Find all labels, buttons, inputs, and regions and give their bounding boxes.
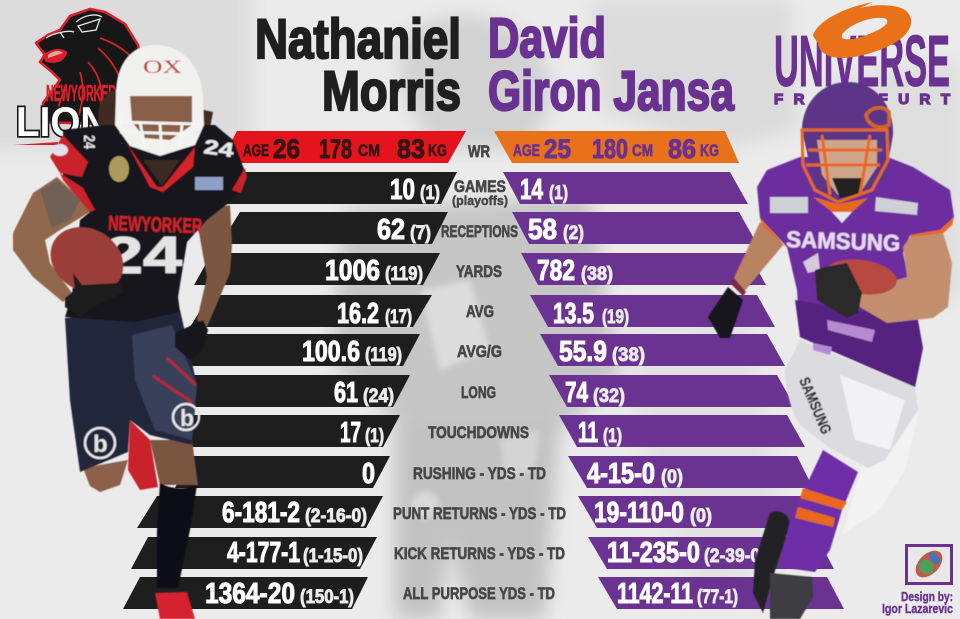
logo: New Yorker Lions: NEWYORKER — [46, 80, 116, 106]
facemask — [116, 100, 200, 155]
title: Nathaniel Morris: Morris — [322, 59, 461, 122]
bio bar: Morris: 178 — [319, 134, 352, 164]
stat labels: AVG — [466, 302, 494, 321]
stat labels: RUSHING - YDS - TD — [413, 464, 546, 483]
arm: left — [733, 222, 783, 293]
stat values: Giron Jansa: (2-39-0) — [704, 546, 766, 567]
credit badge — [906, 546, 952, 584]
stat labels: GAMES — [454, 177, 506, 196]
collar — [813, 197, 868, 212]
stat values: Morris: 0 — [362, 458, 375, 490]
stat labels: YARDS — [456, 262, 502, 281]
stat values: Giron Jansa: (2) — [563, 223, 584, 244]
stat values: Morris: 100.6 — [302, 336, 360, 368]
helmet — [115, 45, 204, 156]
stat values: Giron Jansa: 11-235-0 — [607, 537, 700, 569]
player: David Giron Jansa — [708, 82, 954, 619]
facemask — [802, 130, 888, 202]
near lower leg — [150, 440, 198, 485]
stat values: Morris: (2-16-0) — [305, 506, 367, 527]
design credit — [882, 546, 953, 616]
stat values: Giron Jansa: 4-15-0 — [587, 458, 655, 490]
face — [817, 140, 877, 195]
stat values: Morris: 1006 — [325, 255, 380, 287]
player: Nathaniel Morris: 24 — [80, 135, 97, 149]
stat labels: LONG — [461, 383, 496, 402]
jersey text: NEWYORKER — [108, 212, 203, 238]
stat values: Morris: 1364-20 — [205, 578, 295, 610]
stat values: Morris — [205, 174, 440, 610]
glove: right — [175, 320, 208, 360]
stat labels — [393, 177, 566, 603]
football — [39, 214, 135, 306]
stat values: Giron Jansa: (0) — [690, 506, 712, 527]
stat values: Giron Jansa: 58 — [528, 214, 557, 246]
title: David Giron Jansa: David — [488, 6, 606, 69]
collar diamond — [832, 212, 852, 223]
stat values: Giron Jansa: 55.9 — [559, 336, 607, 368]
title: Nathaniel Morris: Nathaniel — [255, 7, 461, 70]
stat values: Giron Jansa: (32) — [593, 386, 625, 407]
bio bar: Giron Jansa: KG — [700, 141, 719, 160]
stat values: Giron Jansa: 13.5 — [553, 298, 594, 330]
back cleat — [753, 511, 790, 613]
player: Nathaniel Morris: b — [180, 405, 194, 431]
stat values: Giron Jansa: (1) — [603, 426, 622, 447]
stat labels: PUNT RETURNS - YDS - TD — [393, 504, 566, 523]
mini ball icon — [911, 546, 947, 582]
stat values: Morris: (1-15-0) — [303, 546, 363, 567]
stat values: Giron Jansa: (77-1) — [697, 587, 738, 608]
jersey trim — [760, 217, 954, 248]
stat values: Morris: 17 — [340, 417, 361, 449]
stat values: Giron Jansa: 11 — [578, 417, 598, 449]
stat labels: KICK RETURNS - YDS - TD — [394, 544, 565, 563]
stat bars: Giron Jansa — [503, 172, 844, 609]
stat values: Giron Jansa — [520, 174, 766, 610]
stat values: Morris: 6-181-2 — [222, 497, 300, 529]
stat values: Giron Jansa: 1142-11 — [617, 578, 693, 610]
stat labels: (playoffs) — [452, 193, 508, 208]
player: Nathaniel Morris — [13, 45, 247, 619]
sponsor patches — [770, 197, 808, 213]
stat values: Morris: (7) — [410, 223, 431, 244]
stat values: Morris: (119) — [385, 264, 423, 285]
shoe — [155, 592, 195, 619]
glove — [65, 273, 123, 317]
jersey patches — [109, 156, 129, 182]
stat values: Morris: (1) — [365, 426, 384, 447]
stat values: Morris: (17) — [385, 307, 412, 328]
back knee — [83, 460, 128, 492]
sleeve patch — [52, 144, 68, 156]
jersey — [757, 157, 954, 387]
stat values: Giron Jansa: (0) — [661, 467, 683, 488]
arm: right — [860, 233, 952, 323]
player: Nathaniel Morris: 24 — [104, 227, 182, 285]
title: David Giron Jansa — [488, 6, 735, 122]
stat values: Giron Jansa: 74 — [565, 377, 588, 409]
stat values: Morris: 10 — [390, 174, 415, 206]
stat values: Giron Jansa: (38) — [612, 345, 645, 366]
stat values: Morris: 61 — [334, 377, 358, 409]
stat labels: RECEPTIONS — [441, 222, 518, 241]
jersey number — [803, 253, 820, 273]
face — [130, 96, 192, 140]
helmet text: OX — [143, 57, 182, 78]
stat values: Morris: (24) — [363, 386, 394, 407]
lion head — [36, 9, 150, 125]
bio bar: Giron Jansa: AGE — [513, 141, 540, 160]
shoulder numbers: 24 — [202, 136, 236, 162]
arm: right — [197, 205, 232, 327]
stat values: Giron Jansa: (19) — [602, 307, 629, 328]
stat values: Morris: 16.2 — [337, 298, 379, 330]
position label: WR — [468, 142, 490, 161]
bio bar: Giron Jansa — [494, 131, 739, 164]
stat values: Giron Jansa: (38) — [581, 264, 613, 285]
stat labels: ALL PURPOSE YDS - TD — [403, 584, 555, 603]
stat values: Morris: 62 — [377, 214, 405, 246]
stat values: Giron Jansa: 14 — [520, 174, 543, 206]
sock — [157, 483, 197, 588]
title: David Giron Jansa: Giron Jansa — [488, 59, 735, 122]
stat values: Morris: (150-1) — [300, 587, 354, 608]
hair — [98, 88, 213, 128]
jersey sleeve — [50, 135, 88, 177]
bio bar: Morris: 26 — [273, 134, 300, 164]
stat values: Giron Jansa: 782 — [537, 255, 575, 287]
mouth guard — [832, 178, 862, 198]
bio bar: Giron Jansa: CM — [632, 141, 653, 160]
helmet — [802, 82, 893, 205]
stat values: Giron Jansa: (1) — [549, 183, 568, 204]
jersey collar — [128, 145, 195, 192]
stat labels: AVG/G — [457, 342, 502, 361]
bio bar: Giron Jansa: 180 — [592, 134, 628, 164]
logo: New Yorker Lions — [14, 9, 150, 145]
jersey — [63, 125, 247, 322]
orange swoosh — [813, 2, 911, 58]
bio bar: Morris: CM — [358, 141, 380, 160]
bio bar: Morris: AGE — [243, 141, 269, 160]
sock — [780, 450, 858, 572]
shorts — [65, 310, 197, 472]
stat values: Morris: 4-177-1 — [227, 537, 300, 569]
trailing leg — [842, 385, 918, 535]
football — [823, 255, 899, 299]
team wordmark: LIONS — [16, 98, 134, 145]
helmet logo — [866, 108, 889, 127]
shorts logos — [85, 428, 115, 458]
front cleat — [770, 573, 813, 619]
stat values: Giron Jansa: 19-110-0 — [594, 497, 684, 529]
logo: Universe Frankfurt: FRANKFURT — [774, 91, 950, 108]
bio bar: Morris — [220, 131, 466, 164]
bio bar: Giron Jansa: 25 — [544, 134, 571, 164]
pants text: SAMSUNG — [795, 375, 834, 437]
jersey text: SAMSUNG — [786, 226, 901, 256]
stat values: Morris: (1) — [420, 183, 440, 204]
pants — [785, 340, 918, 468]
title: Nathaniel Morris — [255, 7, 461, 122]
stat labels: TOUCHDOWNS — [428, 423, 529, 442]
glove: left — [708, 287, 743, 338]
stat bars: Morris — [123, 172, 457, 609]
arm: left — [13, 177, 93, 302]
bio bar: Giron Jansa: 86 — [668, 134, 696, 164]
glove: right — [815, 263, 862, 318]
bio bar: Morris: 83 — [397, 134, 425, 164]
far foot — [128, 420, 158, 490]
player: Nathaniel Morris: b — [93, 431, 108, 458]
stat values: Morris: (119) — [365, 345, 402, 366]
bio bar: Morris: KG — [428, 141, 447, 160]
